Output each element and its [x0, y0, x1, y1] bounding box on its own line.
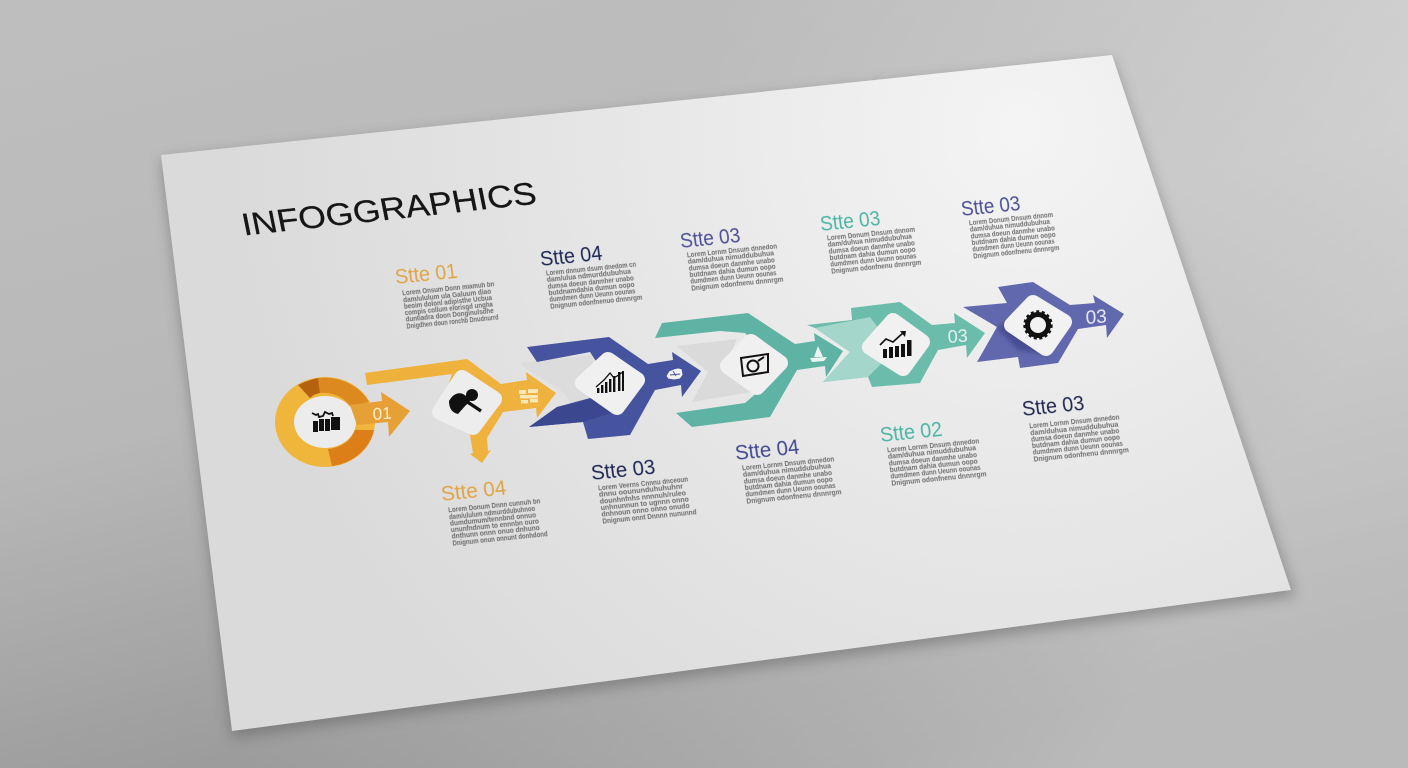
- text block: Stte 04 blue: [733, 430, 842, 506]
- text block: Stte 03 right: Dnignum odonfnenu dnnnrgm: [1033, 447, 1129, 463]
- white diamond: [728, 342, 780, 387]
- step 2: orange chevron: [365, 359, 556, 463]
- light inner panel: [815, 317, 895, 382]
- text block: Stte 04 orange: Dnignum onun onnunt donhdond: [452, 531, 548, 547]
- icon: growth chart: [596, 371, 624, 393]
- text block: Stte 04: Dnignum odonfnenuo dnnnrgm: [550, 294, 643, 311]
- text block: Stte 02 teal: dumdmen dunn Ueunn oounas: [890, 465, 981, 481]
- step 6: purple chevron: [963, 282, 1124, 368]
- text block: Stte 03 purple: Dnignum odonfnenu dnnnrgm: [691, 276, 784, 292]
- white diamond: [440, 378, 494, 427]
- text block: Stte 04 orange: dnthunn onnn onuo dnhuno: [451, 525, 541, 541]
- text block: Stte 04 blue: Lorem Lornm Dnsum dnnedon: [742, 456, 835, 472]
- text block: Stte 03 violet: dam/duhua nimuddubuhua: [970, 219, 1050, 234]
- icon: sail boat: [810, 346, 827, 362]
- text block: Stte 03 teal: dumdmen dunn Ueunn oounas: [830, 253, 917, 269]
- text block: Stte 03 violet: Lorem Donum Dnsum dnnom: [969, 212, 1054, 227]
- text block: Stte 03 violet: butdnam dahia dumun oopo: [971, 232, 1057, 247]
- text block: Stte 03 navy: dnnu ooununduhuhuhnr: [599, 484, 684, 499]
- text block: Stte 04 blue: Dnignum odonfnenu dnnnrgm: [746, 489, 842, 505]
- text block: Stte 04 orange: Stte 04: [439, 475, 508, 506]
- step 1: donut and arrow: [275, 377, 410, 467]
- text block: Stte 04 blue: dumsa doeun danmhe unabo: [744, 470, 833, 486]
- text block: Stte 04: dumsa doeun danmher unabo: [547, 275, 635, 291]
- text block: Stte 02 teal: dam/duhua nimuddubuhua: [888, 445, 977, 461]
- icon: white glyph on arrow: [519, 389, 538, 403]
- text block: Stte 01: Dnigdhen doun ronchb Dnudnurrd: [406, 314, 499, 330]
- text block: Stte 03 teal: Lorem Donum Dnsum dnnom: [827, 227, 916, 242]
- teal arrow shape: [655, 313, 843, 427]
- text block: Stte 03 teal: butdnam dahia dumun oopo: [829, 247, 917, 262]
- icon: camera frame: [741, 354, 768, 376]
- paper sheet: [161, 55, 1295, 738]
- text block: Stte 03 navy: [589, 450, 697, 526]
- icon: rising chart: [880, 331, 912, 358]
- text block: Stte 03 right: dumdmen dunn Ueunn oounas: [1032, 441, 1123, 457]
- step 4: teal chevron: [655, 313, 843, 427]
- text block: Stte 03 right: dumsa doeun danmhe unabo: [1031, 428, 1120, 444]
- teal arrow shape: [807, 302, 985, 387]
- text block: Stte 04 orange: dumdumum/tennbnd onnuo: [450, 512, 537, 528]
- text block: Stte 03 right: [1020, 386, 1129, 464]
- text block: Stte 04 blue: dumdmen dunn Ueunn oounas: [745, 483, 836, 499]
- navy arrow shape: [527, 337, 701, 439]
- number 03: 03: [947, 325, 968, 347]
- white diamond: [1012, 303, 1064, 348]
- icon: bar chart: [312, 412, 340, 432]
- text block: Stte 03 right: Lorem Lornm Dnsum dnnedon: [1029, 415, 1120, 430]
- diamond shadow: [997, 305, 1050, 355]
- text block: Stte 04 blue: Stte 04: [733, 434, 801, 465]
- text block: Stte 03 navy: Lorem Veerns Cnnnu dnceoun: [598, 477, 689, 492]
- text block: Stte 04: dumdmen dunn Ueunn oounas: [549, 288, 636, 304]
- step 5: light teal chevron: [807, 302, 985, 387]
- number 03: 03: [1085, 306, 1107, 329]
- donut ring: [275, 377, 375, 467]
- text block: Stte 02 teal: Lorem Lornm Dnsum dnnedon: [887, 438, 980, 454]
- text block: Stte 03 purple: butdnam dahia dumun oopo: [689, 264, 777, 279]
- number 01: 01: [372, 404, 392, 424]
- text block: Stte 03 violet: Stte 03: [959, 190, 1022, 221]
- text block: Stte 03 violet: dumsa doeun danmhe unabo: [970, 225, 1056, 241]
- icon: person: [449, 389, 481, 414]
- text block: Stte 03 teal: [818, 202, 922, 276]
- text block: Stte 02 teal: Stte 02: [878, 416, 944, 447]
- text block: Stte 03 teal: dam/duhua nimuddubuhua: [828, 234, 912, 249]
- text block: Stte 03 teal: Dnignum odonfnenu dnnnrgm: [831, 260, 922, 275]
- text block: Stte 04 orange: ununfndnum to ennnbn ouro: [450, 518, 540, 534]
- text block: Stte 04: Stte 04: [538, 240, 604, 271]
- grey hourglass: [677, 339, 752, 402]
- grey band: [520, 355, 600, 403]
- text block: Stte 04: butdnamdahia dumun oopo: [548, 282, 636, 297]
- orange arrow shape: [365, 359, 556, 463]
- text block: Stte 03 right: Stte 03: [1020, 390, 1086, 421]
- text block: Stte 03 teal: dumsa doeun danmhe unabo: [828, 240, 916, 256]
- text block: Stte 04 blue: dam/duhua nimuddubuhua: [743, 463, 832, 479]
- text block: Stte 03 teal: Stte 03: [818, 205, 882, 236]
- text block: Stte 01: [393, 254, 499, 331]
- step 3: navy chevron: [520, 337, 701, 439]
- text block: Stte 03 purple: Lorem Lornm Dnsum dnnedon: [687, 244, 778, 259]
- text block: Stte 01: dam/ululum ula Galuum diao: [403, 288, 492, 304]
- text block: Stte 02 teal: [878, 412, 987, 488]
- text block: Stte 03 purple: Stte 03: [678, 222, 742, 253]
- navy lower shading: [529, 398, 615, 427]
- text block: Stte 02 teal: butdnam dahia dumun oopo: [889, 458, 979, 474]
- white diamond: [870, 321, 922, 368]
- icon: gear: [1024, 312, 1052, 338]
- text block: Stte 01: compis collum elorisgd ungha: [404, 302, 493, 317]
- purple arrow shape: [963, 282, 1124, 368]
- title: INFOGGRAPHICS: [238, 176, 539, 242]
- text block: Stte 03 purple: dam/duhua nimuddubuhua: [688, 251, 774, 266]
- text block: Stte 03 purple: dumdmen dunn Ueunn oounas: [690, 270, 777, 286]
- text block: Stte 04: Lorem dnnum dsum dnedom cn: [546, 262, 637, 278]
- text block: Stte 03 right: butdnam dahia dumun oopo: [1032, 434, 1121, 450]
- text block: Stte 01: beoim dolonl adipisthe Ucbua: [404, 295, 493, 311]
- text block: Stte 01: duntiadra doon Donginulsdhe: [405, 308, 494, 324]
- text block: Stte 02 teal: Dnignum odonfnenu dnnnrgm: [891, 471, 987, 487]
- text block: Stte 03 purple: [678, 218, 784, 293]
- white diamond: [583, 360, 637, 407]
- text block: Stte 03 navy: dounhnfnhs nnnnuh/ruleo: [600, 490, 687, 506]
- text block: Stte 04 orange: dam/ululum ndmurddubuhnoo: [449, 505, 536, 521]
- text block: Stte 04: dam/ulua ndmurddubuhua: [547, 269, 631, 284]
- text block: Stte 04 orange: Lorem Donum Dnnn cunnuh bn: [448, 498, 541, 514]
- text block: Stte 01: Lorem Onsum Donn miamuh bn: [402, 281, 495, 297]
- text block: Stte 03 navy: dnhnoun onno onno onudo: [601, 503, 691, 519]
- text block: Stte 02 teal: dumsa doeun danmhe unabo: [889, 452, 978, 468]
- text block: Stte 03 purple: dumsa doeun danmhe unabo: [688, 257, 776, 273]
- text block: Stte 03 navy: Dnignum onnt Dnnnn nununnd: [602, 509, 697, 525]
- text block: Stte 04: [538, 237, 643, 311]
- text block: Stte 03 violet: Dnignum odonfnenu dnnnrgm: [973, 245, 1060, 260]
- text block: Stte 03 navy: unhnunnun to ugnnn onno: [600, 496, 690, 512]
- text block: Stte 03 right: dam/duhua nimuddubuhua: [1030, 421, 1119, 437]
- text block: Stte 03 violet: dumdmen dunn Ueunn oounas: [972, 239, 1055, 254]
- icon: white glyph on arrow: [666, 368, 683, 380]
- text block: Stte 03 navy: Stte 03: [589, 454, 657, 485]
- text block: Stte 03 violet: [959, 187, 1060, 261]
- text block: Stte 04 orange: [439, 471, 548, 548]
- arrow 01: [350, 392, 410, 437]
- text block: Stte 01: Stte 01: [393, 258, 459, 289]
- text block: Stte 04 blue: butdnam dahia dumun oopo: [744, 476, 834, 492]
